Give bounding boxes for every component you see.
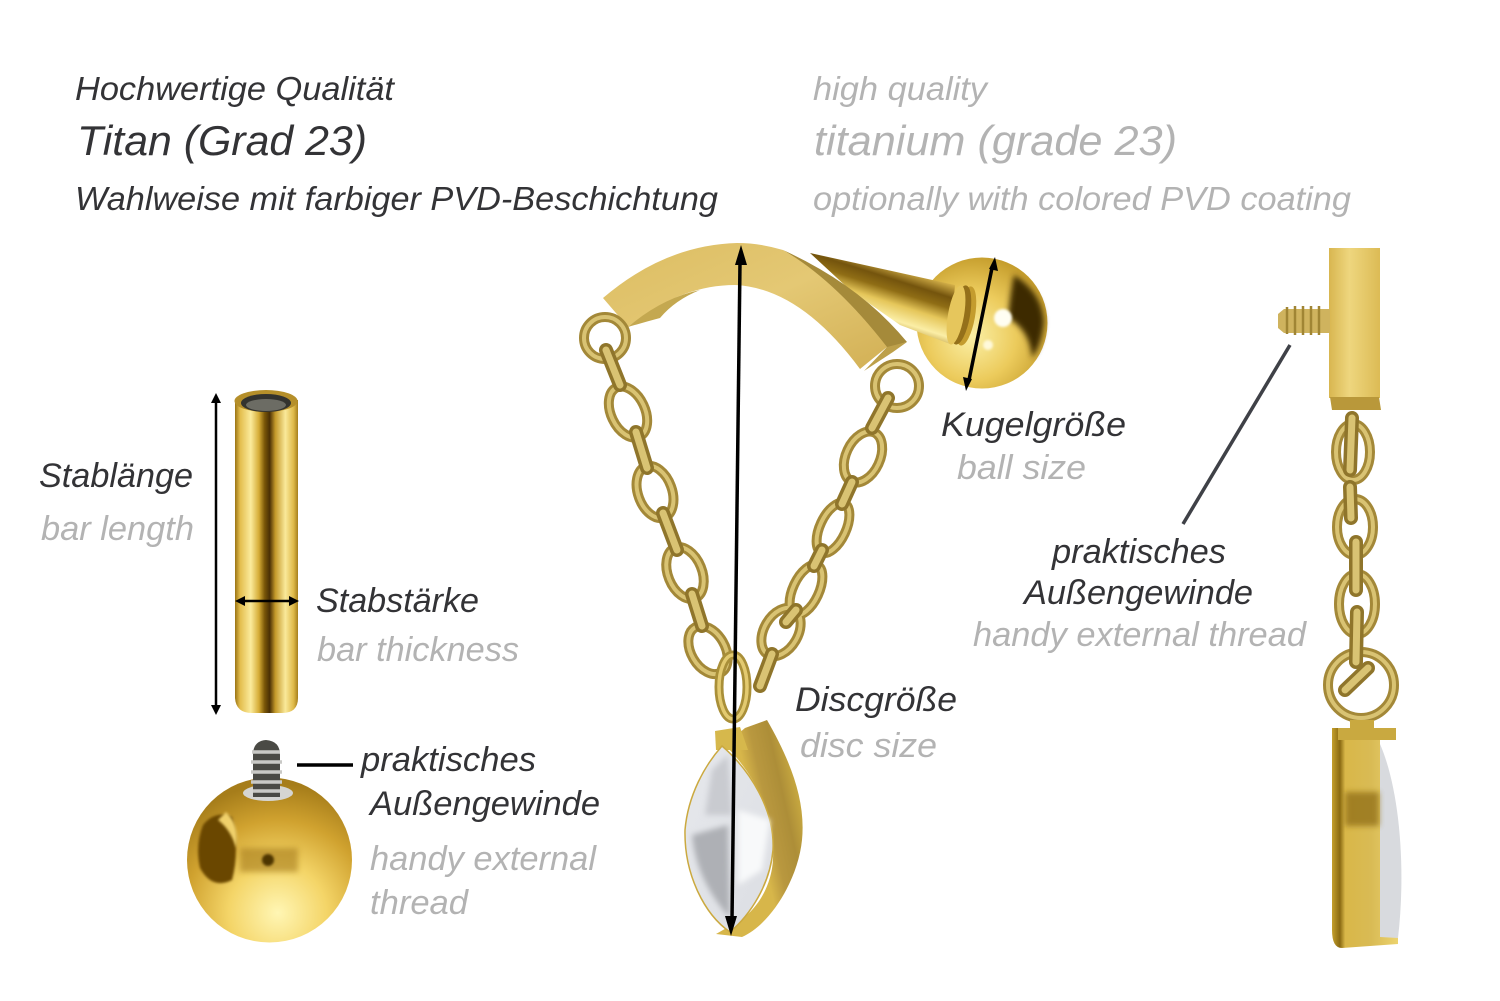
label: bar thickness: Stabstärke <box>316 582 479 620</box>
label: handy external thread, left: praktisches <box>360 741 536 779</box>
icon: right chain <box>753 364 919 686</box>
icon: barbell post and ball <box>810 253 1048 388</box>
heading: English quality text: titanium (grade 23) <box>814 117 1177 164</box>
heading: German quality text <box>75 70 719 217</box>
label: handy external thread, right: praktisches <box>1051 533 1226 571</box>
arrow: bar thickness <box>235 596 299 606</box>
line: thread pointer <box>297 763 353 767</box>
heading: English quality text: high quality <box>813 70 990 107</box>
label: handy external thread, right: Außengewinde <box>1022 574 1253 612</box>
label: disc size: Discgröße <box>795 681 957 719</box>
line: thread leader <box>1183 345 1290 524</box>
label: handy external thread, right: handy external thread <box>973 616 1307 654</box>
label: disc size <box>795 681 957 765</box>
label: ball size <box>941 406 1126 487</box>
label: bar thickness: bar thickness <box>317 631 519 669</box>
label: handy external thread, left: Außengewinde <box>368 785 600 823</box>
icon: threaded ball <box>187 740 352 942</box>
label: handy external thread, left: thread <box>370 884 469 922</box>
heading: English quality text <box>813 70 1352 217</box>
icon: side view block with thread <box>1278 248 1381 410</box>
arrow: bar length <box>211 393 221 715</box>
heading: German quality text: Hochwertige Qualität <box>75 70 396 107</box>
icon: curved bar <box>603 243 907 371</box>
arrow: ball size <box>963 257 998 391</box>
label: bar length <box>39 457 194 548</box>
heading: English quality text: optionally with colored PVD coating <box>813 180 1352 217</box>
label: bar length: bar length <box>41 510 194 548</box>
heading: German quality text: Wahlweise mit farbiger PVD-Beschichtung <box>75 180 719 217</box>
label: ball size: Kugelgröße <box>941 406 1126 444</box>
label: handy external thread, left <box>360 741 600 922</box>
label: handy external thread, right <box>973 533 1307 654</box>
heading: German quality text: Titan (Grad 23) <box>77 117 367 164</box>
label: bar length: Stablänge <box>39 457 193 495</box>
icon: left chain <box>584 317 736 681</box>
label: disc size: disc size <box>800 727 937 765</box>
label: handy external thread, left: handy external <box>370 840 597 878</box>
icon: side view pendant <box>1332 720 1401 948</box>
label: bar thickness <box>316 582 519 669</box>
icon: side view chain <box>1328 418 1394 718</box>
icon: threaded bar <box>234 390 298 713</box>
icon: marquise pendant <box>685 655 803 937</box>
label: ball size: ball size <box>957 449 1086 487</box>
arrow: disc size <box>725 245 747 936</box>
